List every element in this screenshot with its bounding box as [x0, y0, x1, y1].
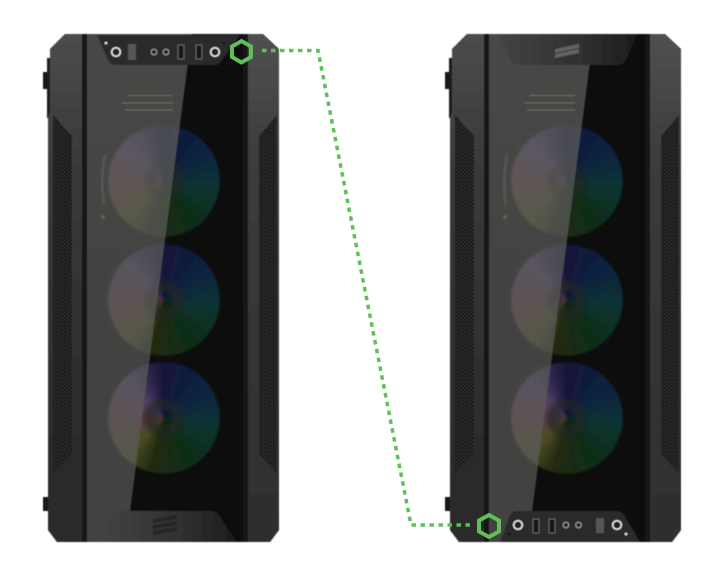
right case: RGB fans	[509, 123, 625, 476]
icon: hexagon marker, top panel	[232, 41, 251, 62]
left case: bottom logo panel	[97, 511, 237, 542]
icon: hexagon marker, bottom panel	[479, 515, 499, 537]
right case: top logo panel	[498, 34, 637, 65]
right case: bottom I/O panel	[500, 511, 640, 542]
right PC case: bottom front panel	[445, 34, 681, 542]
left case: RGB fans	[106, 123, 222, 476]
left case: top I/O panel	[97, 35, 240, 65]
dotted connector between the two panel positions	[262, 50, 470, 525]
left PC case: top front panel	[43, 34, 279, 542]
